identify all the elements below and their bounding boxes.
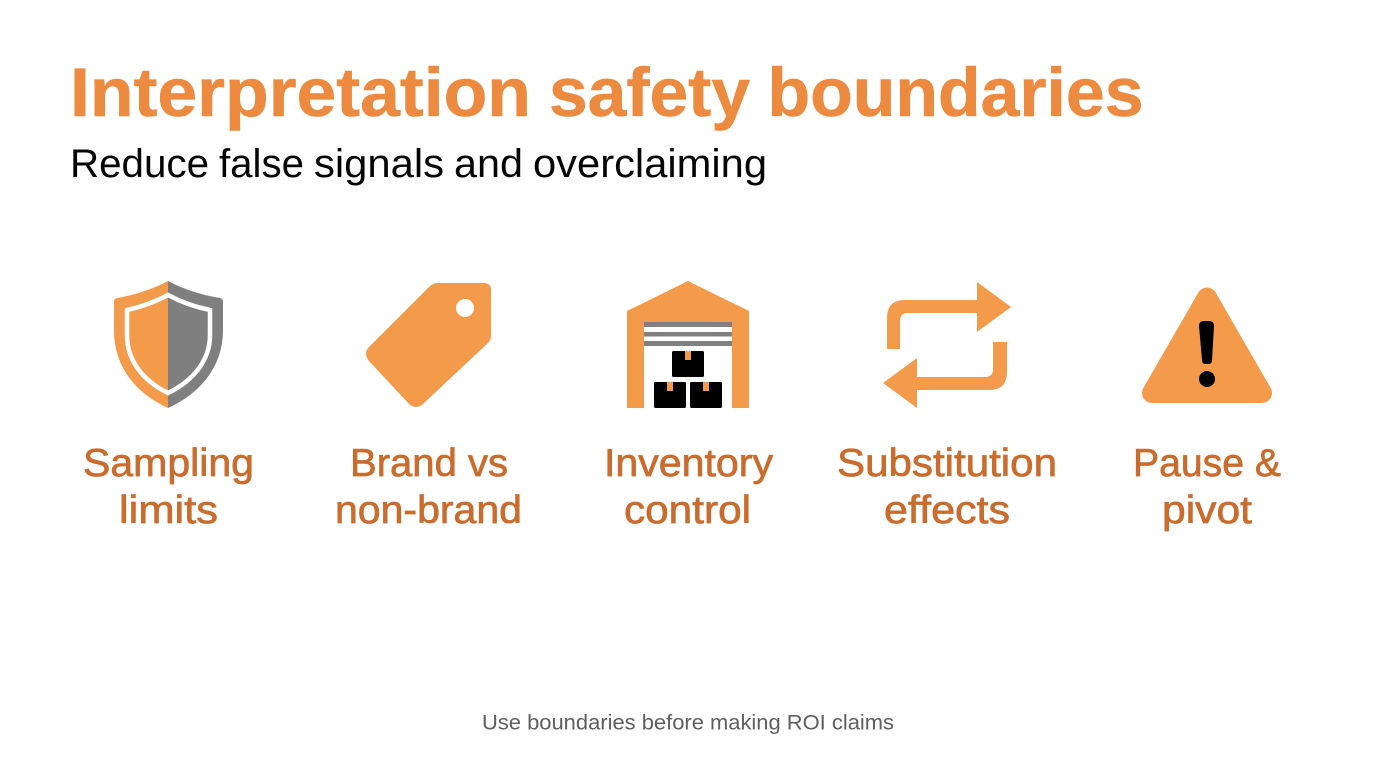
subtitle: false: [219, 142, 304, 186]
icon: warehouse: [627, 281, 749, 408]
item: brand vs non-brand: [335, 283, 522, 532]
label: sampling limits: [83, 442, 254, 532]
icon: swap arrows: [883, 282, 1011, 408]
icon: shield: [114, 281, 223, 408]
label: brand vs non-brand: [335, 442, 522, 532]
label: sampling limits: Sampling: [83, 442, 254, 485]
label: inventory control: Inventory: [604, 442, 774, 485]
label: sampling limits: limits: [119, 489, 218, 532]
footer note: Use boundaries before making ROI claims: [482, 712, 894, 734]
title: safety: [549, 54, 750, 131]
label: brand vs non-brand: non-brand: [335, 489, 522, 532]
subtitle: overclaiming: [533, 142, 767, 186]
subtitle: [70, 142, 767, 186]
label: substitution effects: [837, 442, 1057, 532]
subtitle: Reduce: [70, 142, 209, 186]
label: inventory control: [604, 442, 774, 532]
item: sampling limits: [83, 281, 254, 532]
label: substitution effects: Substitution: [837, 442, 1057, 485]
label: brand vs non-brand: Brand vs: [350, 442, 508, 485]
title: boundaries: [768, 54, 1144, 131]
label: inventory control: control: [624, 489, 751, 532]
icon: price tag: [366, 283, 491, 407]
subtitle: and: [454, 142, 523, 186]
subtitle: signals: [314, 142, 444, 186]
label: pause and pivot: [1133, 442, 1281, 532]
icon: warning triangle: [1152, 298, 1262, 393]
label: substitution effects: effects: [884, 489, 1010, 532]
title: [70, 54, 1144, 131]
label: pause and pivot: pivot: [1162, 489, 1252, 532]
title: Interpretation: [70, 54, 531, 131]
item: substitution effects: [837, 282, 1057, 532]
item: inventory control: [604, 281, 774, 532]
item: pause and pivot: [1133, 298, 1281, 532]
label: pause and pivot: Pause &: [1133, 442, 1281, 485]
